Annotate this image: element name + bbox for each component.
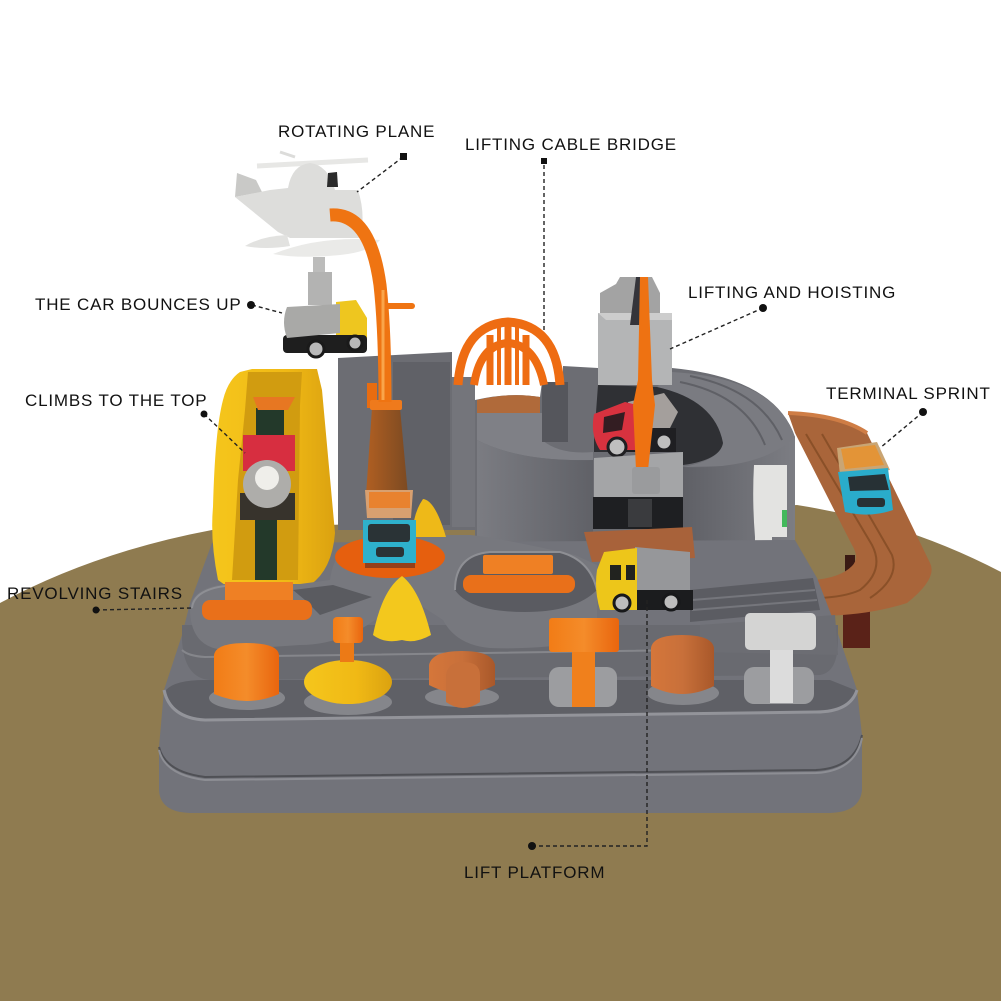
yellow bell (373, 576, 431, 641)
blue truck in the middle (363, 490, 416, 568)
labels: REVOLVING STAIRS (7, 584, 183, 603)
labels (7, 122, 991, 882)
labels: TERMINAL SPRINT (826, 384, 991, 403)
brown platform board (584, 527, 695, 562)
brown ground background (0, 505, 1001, 1001)
yellow blob piece (413, 499, 446, 537)
terminal sprint brown ramp (788, 413, 932, 648)
leader dots (92, 153, 927, 850)
figure-eight tray (190, 535, 597, 650)
labels: ROTATING PLANE (278, 122, 435, 141)
top truck (283, 300, 367, 357)
terminal sprint truck (837, 442, 893, 515)
orange slide tube (330, 215, 412, 402)
orange arch bridge (458, 322, 560, 385)
lifting tower box (598, 277, 672, 385)
leader lines (96, 157, 923, 846)
labels: LIFT PLATFORM (464, 863, 605, 882)
brown column (366, 383, 408, 495)
center orange turntable (335, 536, 445, 578)
buttons row (209, 613, 816, 715)
right road on the deck (690, 578, 838, 655)
silver lift panel and black base (593, 452, 683, 529)
yellow truck (596, 547, 693, 611)
labels: CLIMBS TO THE TOP (25, 391, 207, 410)
base platform (159, 540, 862, 813)
red truck (593, 393, 678, 456)
white gate (738, 465, 788, 581)
labels: THE CAR BOUNCES UP (35, 295, 242, 314)
tower walls and curved track (338, 352, 795, 585)
helicopter (235, 152, 380, 305)
orange cable tube (632, 277, 660, 494)
labels: LIFTING AND HOISTING (688, 283, 896, 302)
yellow climbing wheel (212, 369, 335, 585)
orange pads in trays (202, 555, 575, 620)
labels: LIFTING CABLE BRIDGE (465, 135, 677, 154)
